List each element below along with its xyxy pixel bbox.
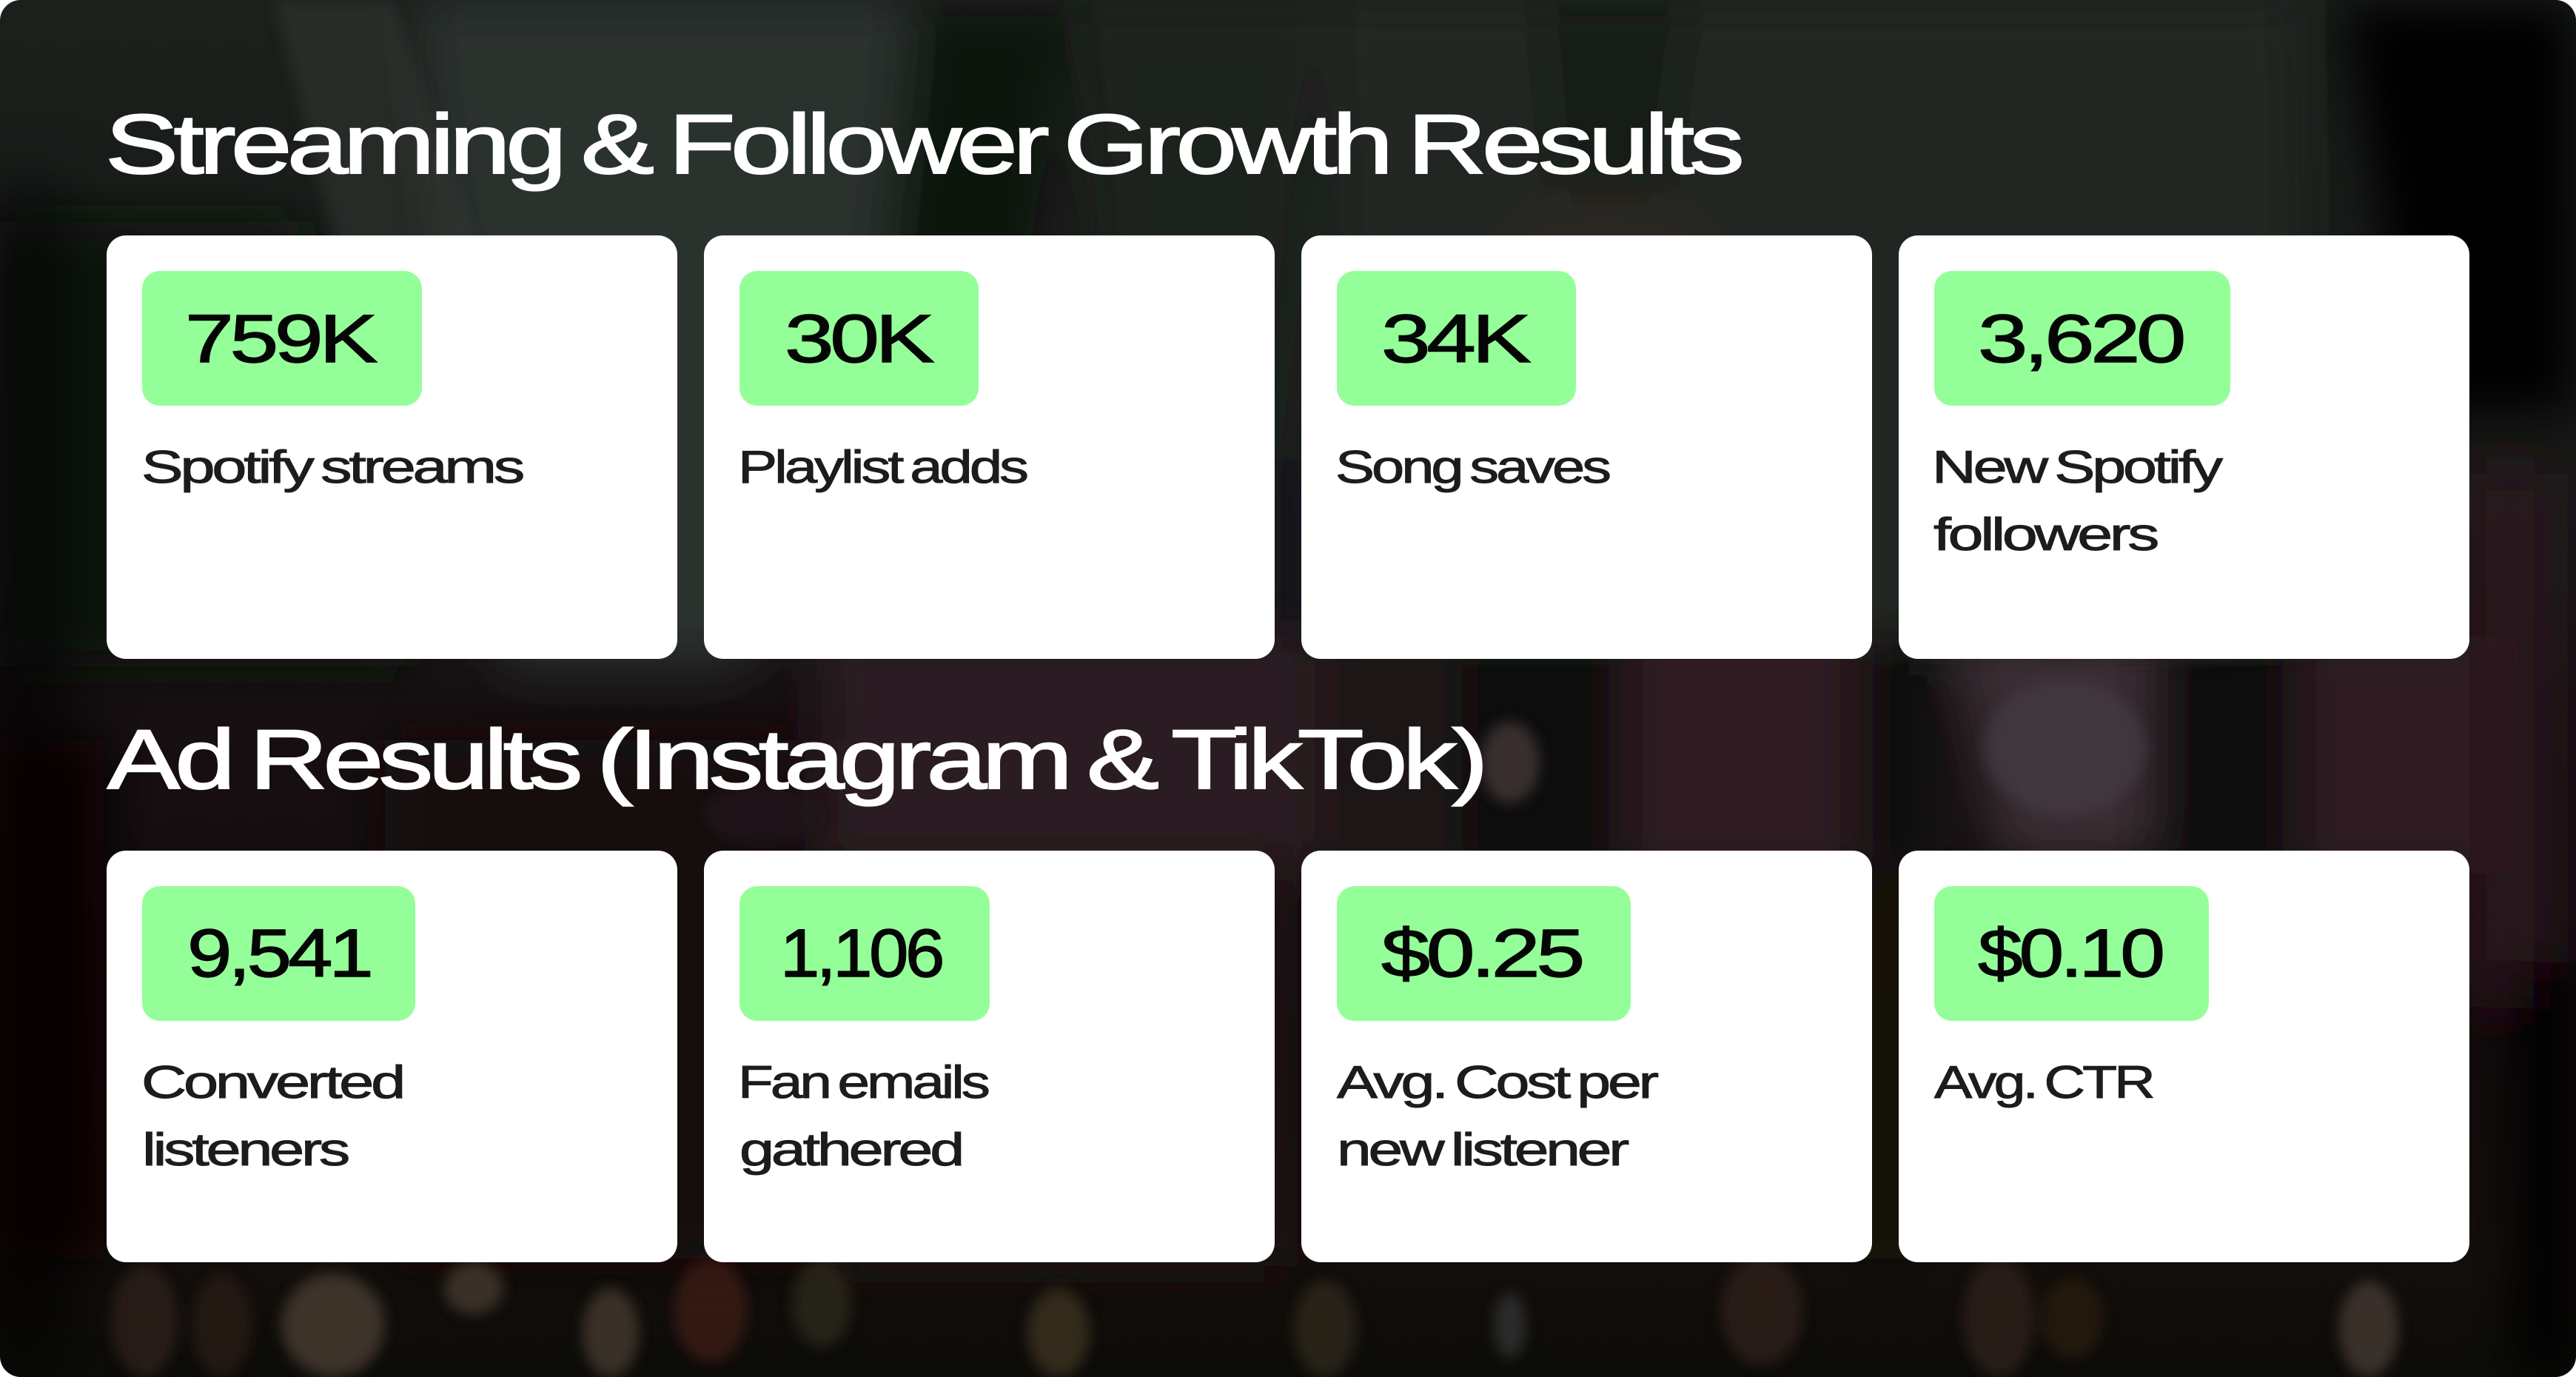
panel: Avg. Cost per new listener	[1301, 851, 1872, 1262]
panel: Converted listeners: listeners	[142, 1125, 348, 1176]
heading: ad results: Ad Results (Instagram & TikTok)	[107, 713, 1483, 807]
panel: New Spotify followers	[1899, 235, 2469, 659]
panel: New Spotify followers: 3,620	[1978, 301, 2183, 377]
panel: Avg. Cost per new listener: $0.25	[1381, 916, 1582, 991]
panel: Spotify streams: 759K	[185, 301, 378, 377]
panel: Converted listeners	[107, 851, 677, 1262]
panel: Avg. Cost per new listener: Avg. Cost per	[1337, 1057, 1658, 1108]
panel: Fan emails gathered: Fan emails	[738, 1057, 988, 1108]
panel: Playlist adds: Playlist adds	[738, 442, 1027, 493]
panel: New Spotify followers: New Spotify	[1932, 442, 2223, 493]
panel: New Spotify followers: followers	[1933, 509, 2158, 560]
panel: Converted listeners: 9,541	[187, 916, 370, 991]
heading: streaming and follower growth results: Streaming & Follower Growth Results	[105, 98, 1740, 192]
panel: Song saves	[1301, 235, 1872, 659]
panel: Converted listeners: Converted	[141, 1057, 403, 1108]
panel: Song saves: Song saves	[1335, 442, 1609, 493]
panel: Avg. CTR: $0.10	[1978, 916, 2162, 991]
panel: Playlist adds: 30K	[785, 301, 934, 377]
panel: Fan emails gathered: 1,106	[780, 916, 942, 991]
panel: Avg. Cost per new listener: new listener	[1337, 1125, 1629, 1176]
panel: Fan emails gathered: gathered	[739, 1125, 962, 1176]
panel: Avg. CTR	[1899, 851, 2469, 1262]
panel: Song saves: 34K	[1381, 301, 1531, 377]
panel: Playlist adds	[704, 235, 1275, 659]
panel: Fan emails gathered	[704, 851, 1275, 1262]
panel: Spotify streams	[107, 235, 677, 659]
panel: Avg. CTR: Avg. CTR	[1934, 1057, 2153, 1108]
panel: Spotify streams: Spotify streams	[141, 442, 523, 493]
